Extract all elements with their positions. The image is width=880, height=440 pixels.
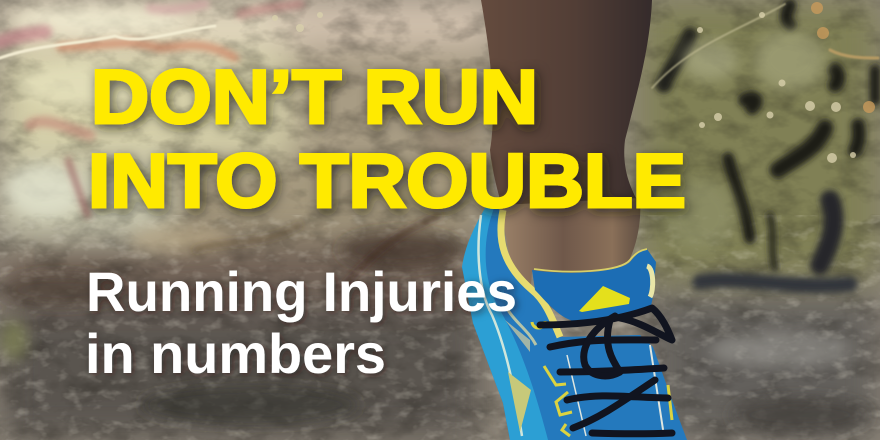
title: INTO TROUBLE [88, 139, 686, 224]
shoe body [462, 203, 687, 440]
subtitle: Running Injuries [86, 260, 517, 323]
running shoe [462, 203, 687, 440]
yellow collar lining [501, 210, 560, 337]
pink streaks and ridge line [0, 4, 440, 285]
shoe laces [540, 308, 672, 434]
title [88, 55, 686, 224]
eyelet panels [532, 321, 672, 436]
subtitle [87, 269, 522, 379]
shoe tongue logo [579, 286, 630, 312]
shoe tongue [532, 249, 656, 322]
runner's leg [481, 0, 652, 296]
subtitle: in numbers [85, 322, 386, 385]
title: DON’T RUN [91, 55, 538, 140]
